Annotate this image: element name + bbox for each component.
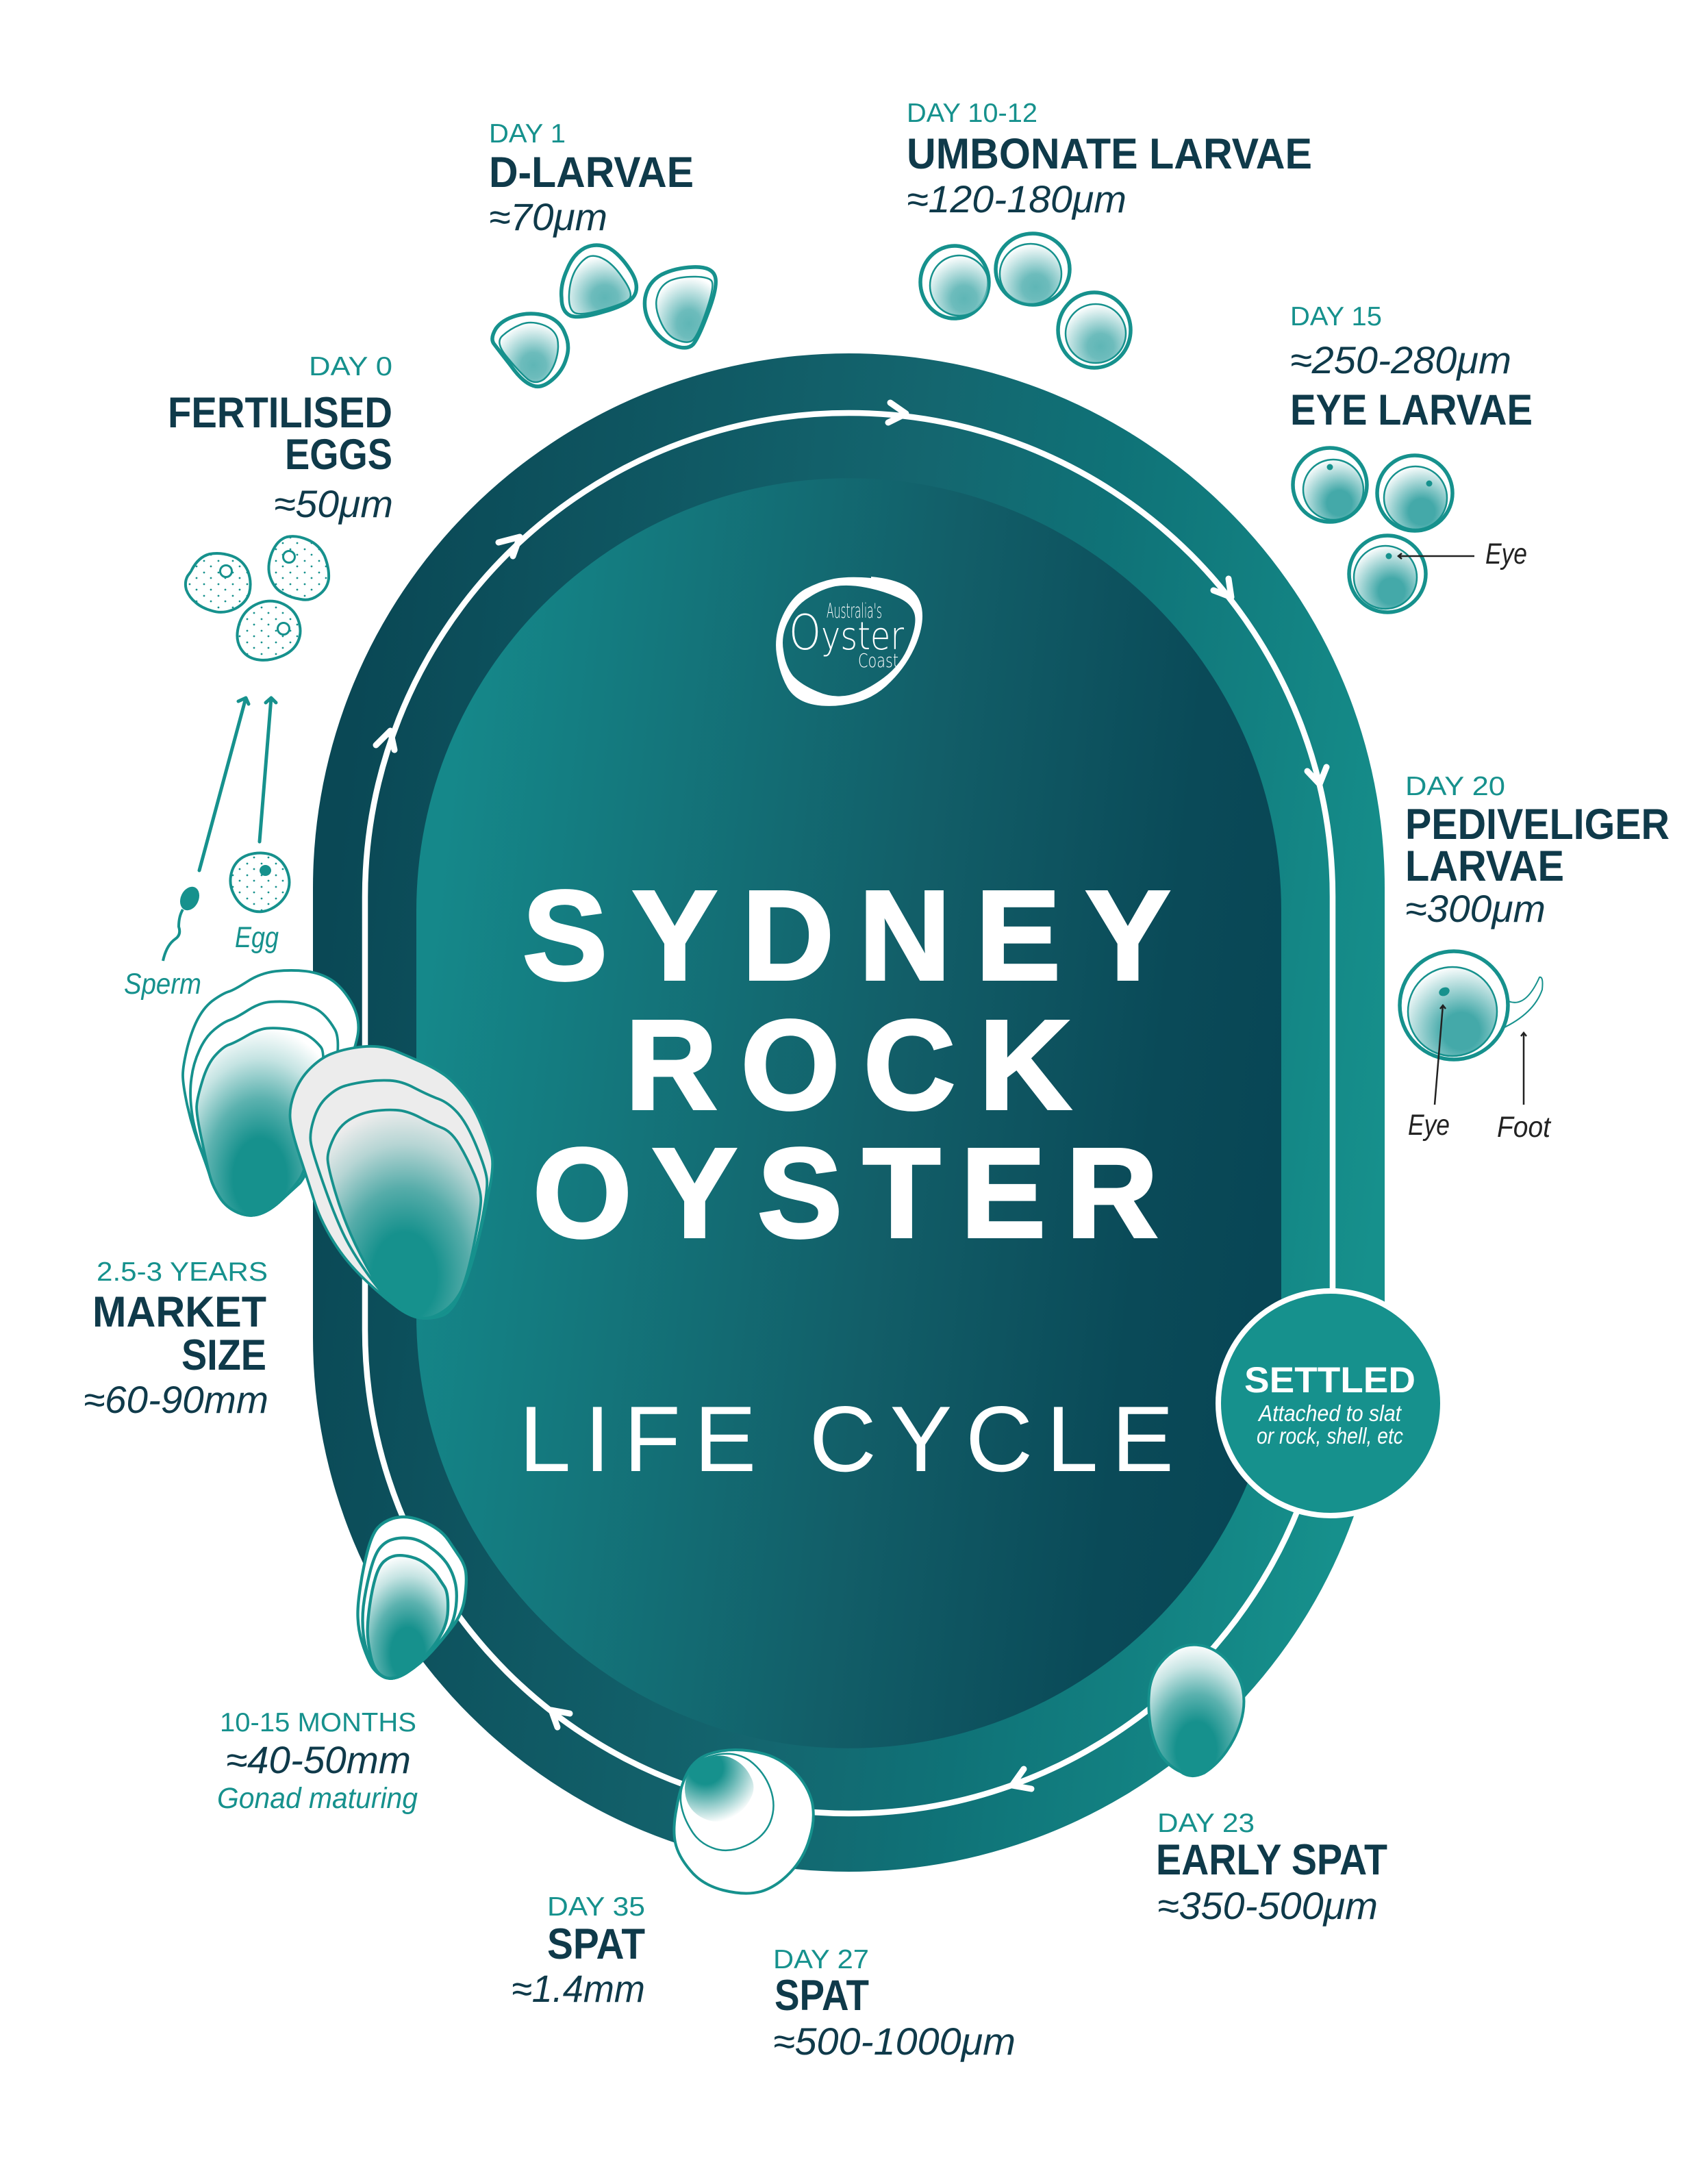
label: 2.5-3 years market size: ≈60-90mm bbox=[84, 1378, 268, 1421]
logo: Australia's Oyster Coast: Oyster bbox=[789, 605, 904, 661]
label: 2.5-3 years market size: 2.5-3 YEARS bbox=[97, 1257, 268, 1287]
label: day 0 fertilised eggs bbox=[168, 352, 393, 525]
label: day 15 eye larvae: ≈250-280μm bbox=[1290, 338, 1511, 381]
title: Sydney Rock Oyster: OYSTER bbox=[533, 1122, 1158, 1264]
logo: Australia's Oyster Coast: Coast bbox=[858, 649, 898, 672]
label: day 10-12 umbonate larvae: ≈120-180μm bbox=[907, 177, 1127, 221]
label: eye: Eye bbox=[1485, 538, 1527, 570]
icon: market size oyster, back bbox=[183, 970, 358, 1216]
label: day 35 spat: DAY 35 bbox=[547, 1892, 645, 1922]
arrow: egg to eggs bbox=[260, 698, 276, 842]
label: day 1 D-larvae: ≈70μm bbox=[489, 195, 607, 238]
label: day 15 eye larvae bbox=[1290, 302, 1533, 434]
label: day 20 pediveliger larvae bbox=[1405, 772, 1670, 930]
cycle path line bbox=[365, 413, 1333, 1813]
label: day 35 spat bbox=[512, 1892, 645, 2010]
label: day 15 eye larvae: DAY 15 bbox=[1290, 302, 1382, 331]
label: 2.5-3 years market size bbox=[84, 1257, 268, 1421]
label: day 20 pediveliger larvae: DAY 20 bbox=[1405, 772, 1505, 801]
arrow: pediveliger foot callout bbox=[1521, 1033, 1526, 1105]
badge: settled: Attached to slat bbox=[1257, 1401, 1402, 1426]
label: day 0 fertilised eggs: FERTILISED bbox=[168, 389, 392, 437]
label: 10-15 months: Gonad maturing bbox=[217, 1782, 418, 1815]
icon: sperm bbox=[163, 883, 203, 961]
label: day 0 fertilised eggs: ≈50μm bbox=[274, 482, 393, 525]
icon: early spat bbox=[1148, 1645, 1244, 1776]
label: day 20 pediveliger larvae: PEDIVELIGER bbox=[1405, 801, 1670, 849]
icon: eye larvae bbox=[1293, 448, 1452, 612]
label: day 15 eye larvae: EYE LARVAE bbox=[1290, 386, 1533, 434]
subtitle: Life Cycle: LIFE CYCLE bbox=[519, 1387, 1174, 1491]
label: pediveliger callouts: Foot bbox=[1497, 1111, 1552, 1144]
label: day 0 fertilised eggs: EGGS bbox=[285, 431, 392, 479]
label: 2.5-3 years market size: SIZE bbox=[181, 1331, 266, 1379]
label: day 20 pediveliger larvae: LARVAE bbox=[1405, 842, 1564, 890]
panel: outer ring track bbox=[313, 353, 1385, 1872]
badge: settled: SETTLED bbox=[1244, 1360, 1415, 1401]
label: 10-15 months: ≈40-50mm bbox=[226, 1738, 411, 1781]
label: day 23 early spat: EARLY SPAT bbox=[1156, 1836, 1387, 1884]
label: pediveliger callouts: Eye bbox=[1408, 1109, 1450, 1142]
badge: settled: or rock, shell, etc bbox=[1257, 1423, 1403, 1448]
label: day 20 pediveliger larvae: ≈300μm bbox=[1405, 887, 1546, 930]
label: day 10-12 umbonate larvae bbox=[907, 99, 1312, 221]
label: day 1 D-larvae: D-LARVAE bbox=[489, 149, 694, 197]
icon: egg bbox=[230, 853, 289, 912]
label: day 27 spat: DAY 27 bbox=[773, 1945, 869, 1974]
title: Sydney Rock Oyster: ROCK bbox=[625, 994, 1071, 1136]
label: day 10-12 umbonate larvae: UMBONATE LARVAE bbox=[907, 130, 1312, 178]
label: day 35 spat: ≈1.4mm bbox=[512, 1967, 645, 2010]
label: egg: Egg bbox=[235, 921, 279, 954]
arrow: sperm to eggs bbox=[199, 698, 249, 870]
label: day 35 spat: SPAT bbox=[547, 1920, 645, 1968]
label: day 23 early spat: DAY 23 bbox=[1157, 1809, 1255, 1838]
icon: D-larvae shells bbox=[492, 245, 716, 386]
label: 10-15 months: 10-15 MONTHS bbox=[220, 1708, 416, 1737]
title: Sydney Rock Oyster: SYDNEY bbox=[523, 865, 1170, 1007]
label: day 10-12 umbonate larvae: DAY 10-12 bbox=[907, 99, 1037, 128]
arrows on cycle path bbox=[376, 403, 1326, 1789]
label: day 0 fertilised eggs: DAY 0 bbox=[309, 352, 392, 381]
arrow: eye callout bbox=[1398, 553, 1474, 559]
title: Sydney Rock Oyster bbox=[523, 865, 1170, 1264]
logo: Australia's Oyster Coast bbox=[776, 577, 922, 706]
logo: Australia's Oyster Coast: Australia's bbox=[827, 599, 882, 623]
label: 2.5-3 years market size: MARKET bbox=[92, 1288, 266, 1336]
label: day 27 spat bbox=[773, 1945, 1016, 2063]
panel: inner central field bbox=[416, 478, 1281, 1748]
label: pediveliger callouts bbox=[1408, 1109, 1552, 1144]
label: sperm: Sperm bbox=[124, 968, 201, 1001]
label: day 23 early spat: ≈350-500μm bbox=[1157, 1884, 1378, 1927]
icon: day 27 spat bbox=[674, 1750, 814, 1894]
label: day 1 D-larvae: DAY 1 bbox=[489, 119, 566, 149]
label: day 27 spat: SPAT bbox=[775, 1972, 869, 2020]
arrow: pediveliger eye callout bbox=[1435, 1005, 1446, 1105]
label: day 23 early spat bbox=[1156, 1809, 1387, 1927]
icon: market size oyster, front bbox=[290, 1046, 492, 1318]
icon: 10-15 month oyster bbox=[357, 1517, 466, 1679]
icon: pediveliger larva with foot bbox=[1400, 951, 1542, 1059]
label: day 1 D-larvae bbox=[489, 119, 694, 238]
icon: umbonate larvae shells bbox=[920, 234, 1131, 368]
badge: settled bbox=[1218, 1291, 1443, 1516]
label: 10-15 months bbox=[217, 1708, 418, 1815]
label: day 27 spat: ≈500-1000μm bbox=[773, 2020, 1016, 2063]
icon: fertilised eggs bbox=[186, 536, 329, 660]
